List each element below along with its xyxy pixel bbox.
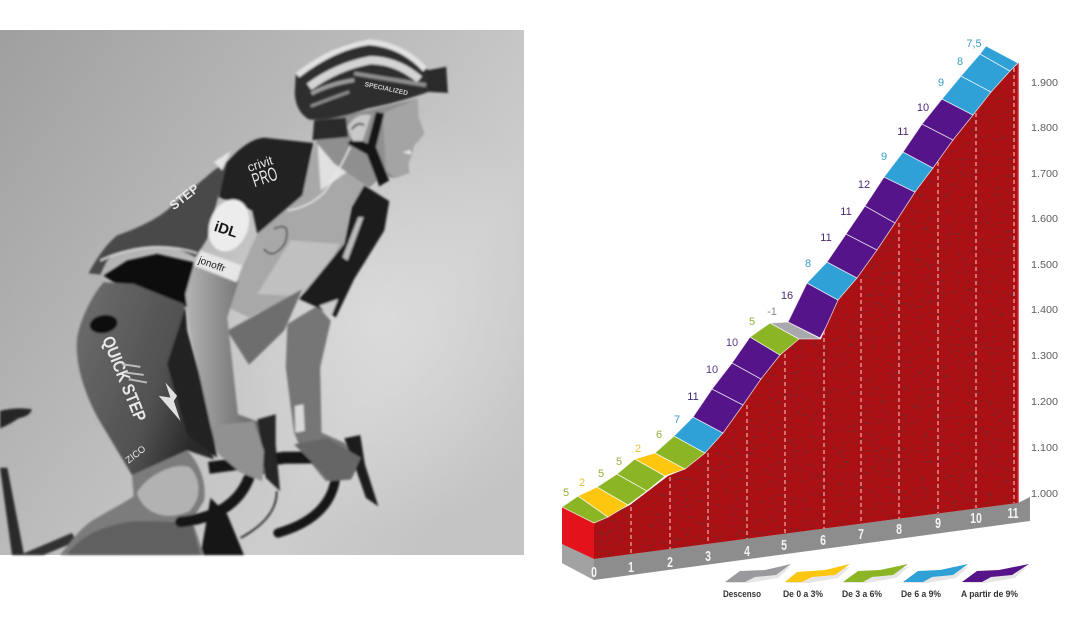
helmet (295, 39, 448, 120)
altitude axis labels: 1.200 (1031, 396, 1058, 408)
earphone cable (287, 147, 350, 210)
legend: A partir de 9% (961, 564, 1029, 599)
km axis labels: 8 (896, 520, 902, 537)
red mountain body (594, 63, 1018, 559)
legend: De 0 a 3% (783, 564, 850, 599)
km axis labels (591, 504, 1019, 580)
legend: De 6 a 9% (901, 564, 968, 599)
photo: cyclist in black and white (0, 30, 524, 555)
gradient percentage labels: 5 (616, 456, 622, 468)
gradient percentage labels: 16 (781, 290, 793, 302)
legend: De 6 a 9%: De 6 a 9% (901, 589, 941, 599)
bicycle saddle and frame (0, 408, 244, 555)
mesh undershirt (227, 289, 302, 365)
gradient percentage labels: 9 (938, 77, 944, 89)
altitude axis labels: 1.300 (1031, 350, 1058, 362)
jersey and kit lettering: QUICK STEP (98, 333, 151, 424)
gradient percentage labels: 6 (656, 429, 662, 441)
km dashed guide lines (631, 68, 1014, 554)
altitude axis labels: 1.700 (1031, 168, 1058, 180)
rider far arm (286, 306, 363, 481)
photo sky background (0, 30, 524, 555)
km axis labels: 0 (591, 563, 597, 580)
km axis labels: 6 (820, 531, 826, 548)
gradient percentage labels: 5 (749, 316, 755, 328)
km axis labels: 3 (705, 547, 711, 564)
helmet strap (348, 112, 389, 186)
gradient percentage labels: 11 (897, 126, 909, 138)
gradient percentage labels: 12 (858, 179, 870, 191)
gradient percentage labels: 5 (563, 487, 569, 499)
altitude axis labels: 1.100 (1031, 442, 1058, 454)
gradient percentage labels: 10 (726, 337, 738, 349)
jersey and kit lettering (98, 81, 409, 465)
gradient percentage labels: 10 (917, 102, 929, 114)
gradient percentage labels: 7 (674, 414, 680, 426)
altitude axis labels: 1.600 (1031, 213, 1058, 225)
gradient percentage labels: 5 (598, 468, 604, 480)
altitude axis labels: 1.000 (1031, 488, 1058, 500)
grey base km strip (562, 497, 1030, 580)
hands on the bar (211, 421, 264, 481)
altitude axis labels (1031, 77, 1058, 500)
altitude axis labels: 1.400 (1031, 304, 1058, 316)
legend: De 0 a 3%: De 0 a 3% (783, 589, 823, 599)
legend: A partir de 9%: A partir de 9% (961, 589, 1018, 599)
gradient percentage labels: 2 (579, 477, 585, 489)
gradient percentage labels: 8 (805, 258, 811, 270)
rider leg (60, 450, 205, 555)
km axis labels: 7 (858, 525, 864, 542)
white Lidl armband (202, 194, 256, 257)
km axis labels: 11 (1007, 504, 1019, 521)
legend (723, 564, 1029, 599)
rider jersey sleeve (219, 138, 313, 234)
altitude axis labels: 1.800 (1031, 122, 1058, 134)
climb profile chart (562, 38, 1058, 580)
km axis labels: 1 (628, 558, 634, 575)
rider shorts (77, 282, 217, 475)
team logo badge on shorts (88, 313, 119, 335)
gradient percentage labels: 11 (687, 391, 699, 403)
jersey and kit lettering: jonoffr (196, 255, 227, 275)
gradient percentage labels: 11 (840, 206, 852, 218)
gradient percentage labels: 9 (881, 151, 887, 163)
jersey and kit lettering: STEP (167, 181, 202, 213)
jersey and kit lettering: ZICO (124, 444, 147, 465)
gradient percentage labels: 2 (635, 443, 641, 455)
gradient strip segments (562, 46, 1018, 523)
altitude axis labels: 1.900 (1031, 77, 1058, 89)
km axis labels: 10 (970, 509, 982, 526)
legend: Descenso (723, 564, 791, 599)
rider near arm (185, 262, 267, 474)
gradient percentage labels (563, 38, 982, 499)
rider jersey right side (299, 185, 389, 317)
gradient percentage labels: 10 (706, 364, 718, 376)
rider bare chest (227, 142, 365, 317)
gradient percentage labels: 8 (957, 56, 963, 68)
jersey and kit lettering: SPECIALIZED (364, 81, 409, 97)
km axis labels: 4 (744, 542, 751, 559)
jersey and kit lettering: PRO (249, 163, 280, 192)
km axis labels: 2 (667, 553, 673, 570)
gradient percentage labels: -1 (767, 306, 777, 318)
rider waist (104, 254, 201, 307)
gradient percentage labels: 7,5 (966, 38, 982, 50)
legend: Descenso: Descenso (723, 589, 761, 599)
rider jersey vest (89, 159, 231, 275)
altitude axis labels: 1.500 (1031, 259, 1058, 271)
jersey and kit lettering: crivit (246, 153, 275, 175)
legend: De 3 a 6% (842, 564, 908, 599)
gradient percentage labels: 11 (820, 232, 832, 244)
head and face (312, 99, 424, 188)
km axis labels: 9 (935, 514, 941, 531)
red front face (562, 507, 594, 559)
jersey and kit lettering: iDL (212, 219, 239, 242)
white sleeve band (194, 251, 242, 282)
legend: De 3 a 6%: De 3 a 6% (842, 589, 882, 599)
km axis labels: 5 (781, 536, 787, 553)
ear and earpiece (348, 115, 371, 141)
handlebar and brake levers (180, 414, 378, 538)
